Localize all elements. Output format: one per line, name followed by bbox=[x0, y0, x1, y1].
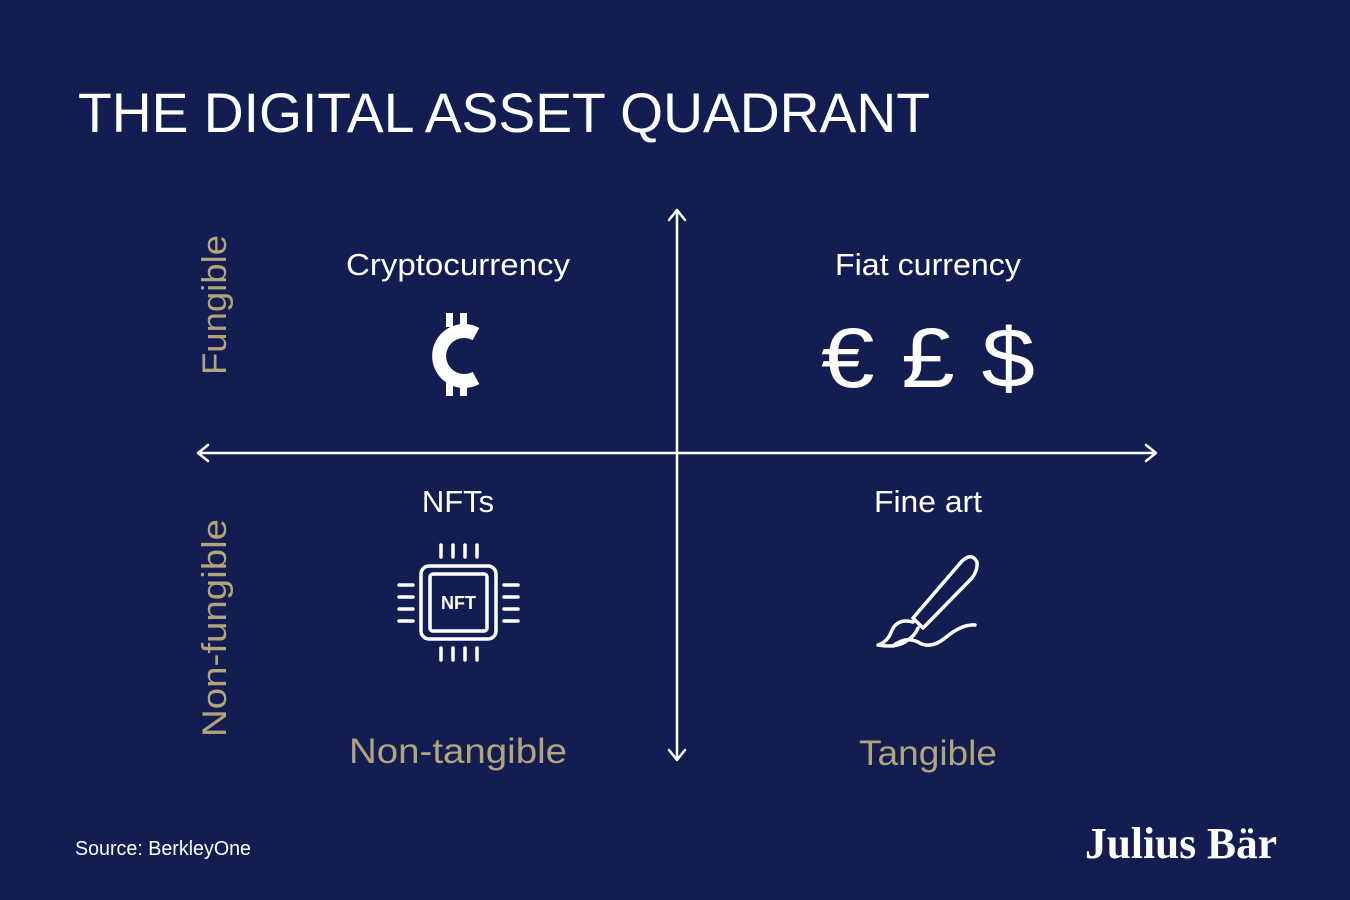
source: Source: BerkleyOne bbox=[75, 838, 251, 860]
axis label: Non-tangible: Non-tangible bbox=[349, 732, 567, 771]
icon: currency symbols: € £ $ bbox=[821, 311, 1035, 405]
icon: bitcoin bbox=[439, 313, 476, 396]
axis label: Tangible: Tangible bbox=[859, 734, 997, 773]
quadrant heading: Fine art: Fine art bbox=[874, 484, 982, 519]
quadrant heading: NFTs: NFTs bbox=[422, 484, 494, 519]
quadrant heading: Fiat currency: Fiat currency bbox=[835, 247, 1022, 282]
title: THE DIGITAL ASSET QUADRANT bbox=[78, 81, 930, 144]
icon: NFT chip bbox=[399, 545, 518, 660]
axes bbox=[198, 210, 1156, 760]
quadrant heading: Cryptocurrency: Cryptocurrency bbox=[346, 247, 571, 282]
icon: paintbrush bbox=[878, 557, 977, 646]
axis label: Fungible: Fungible bbox=[196, 235, 234, 375]
logo: Julius Bär: Julius Bär bbox=[1085, 819, 1277, 868]
axis label: Non-fungible: Non-fungible bbox=[196, 519, 234, 737]
icon: NFT chip: NFT bbox=[441, 593, 476, 613]
